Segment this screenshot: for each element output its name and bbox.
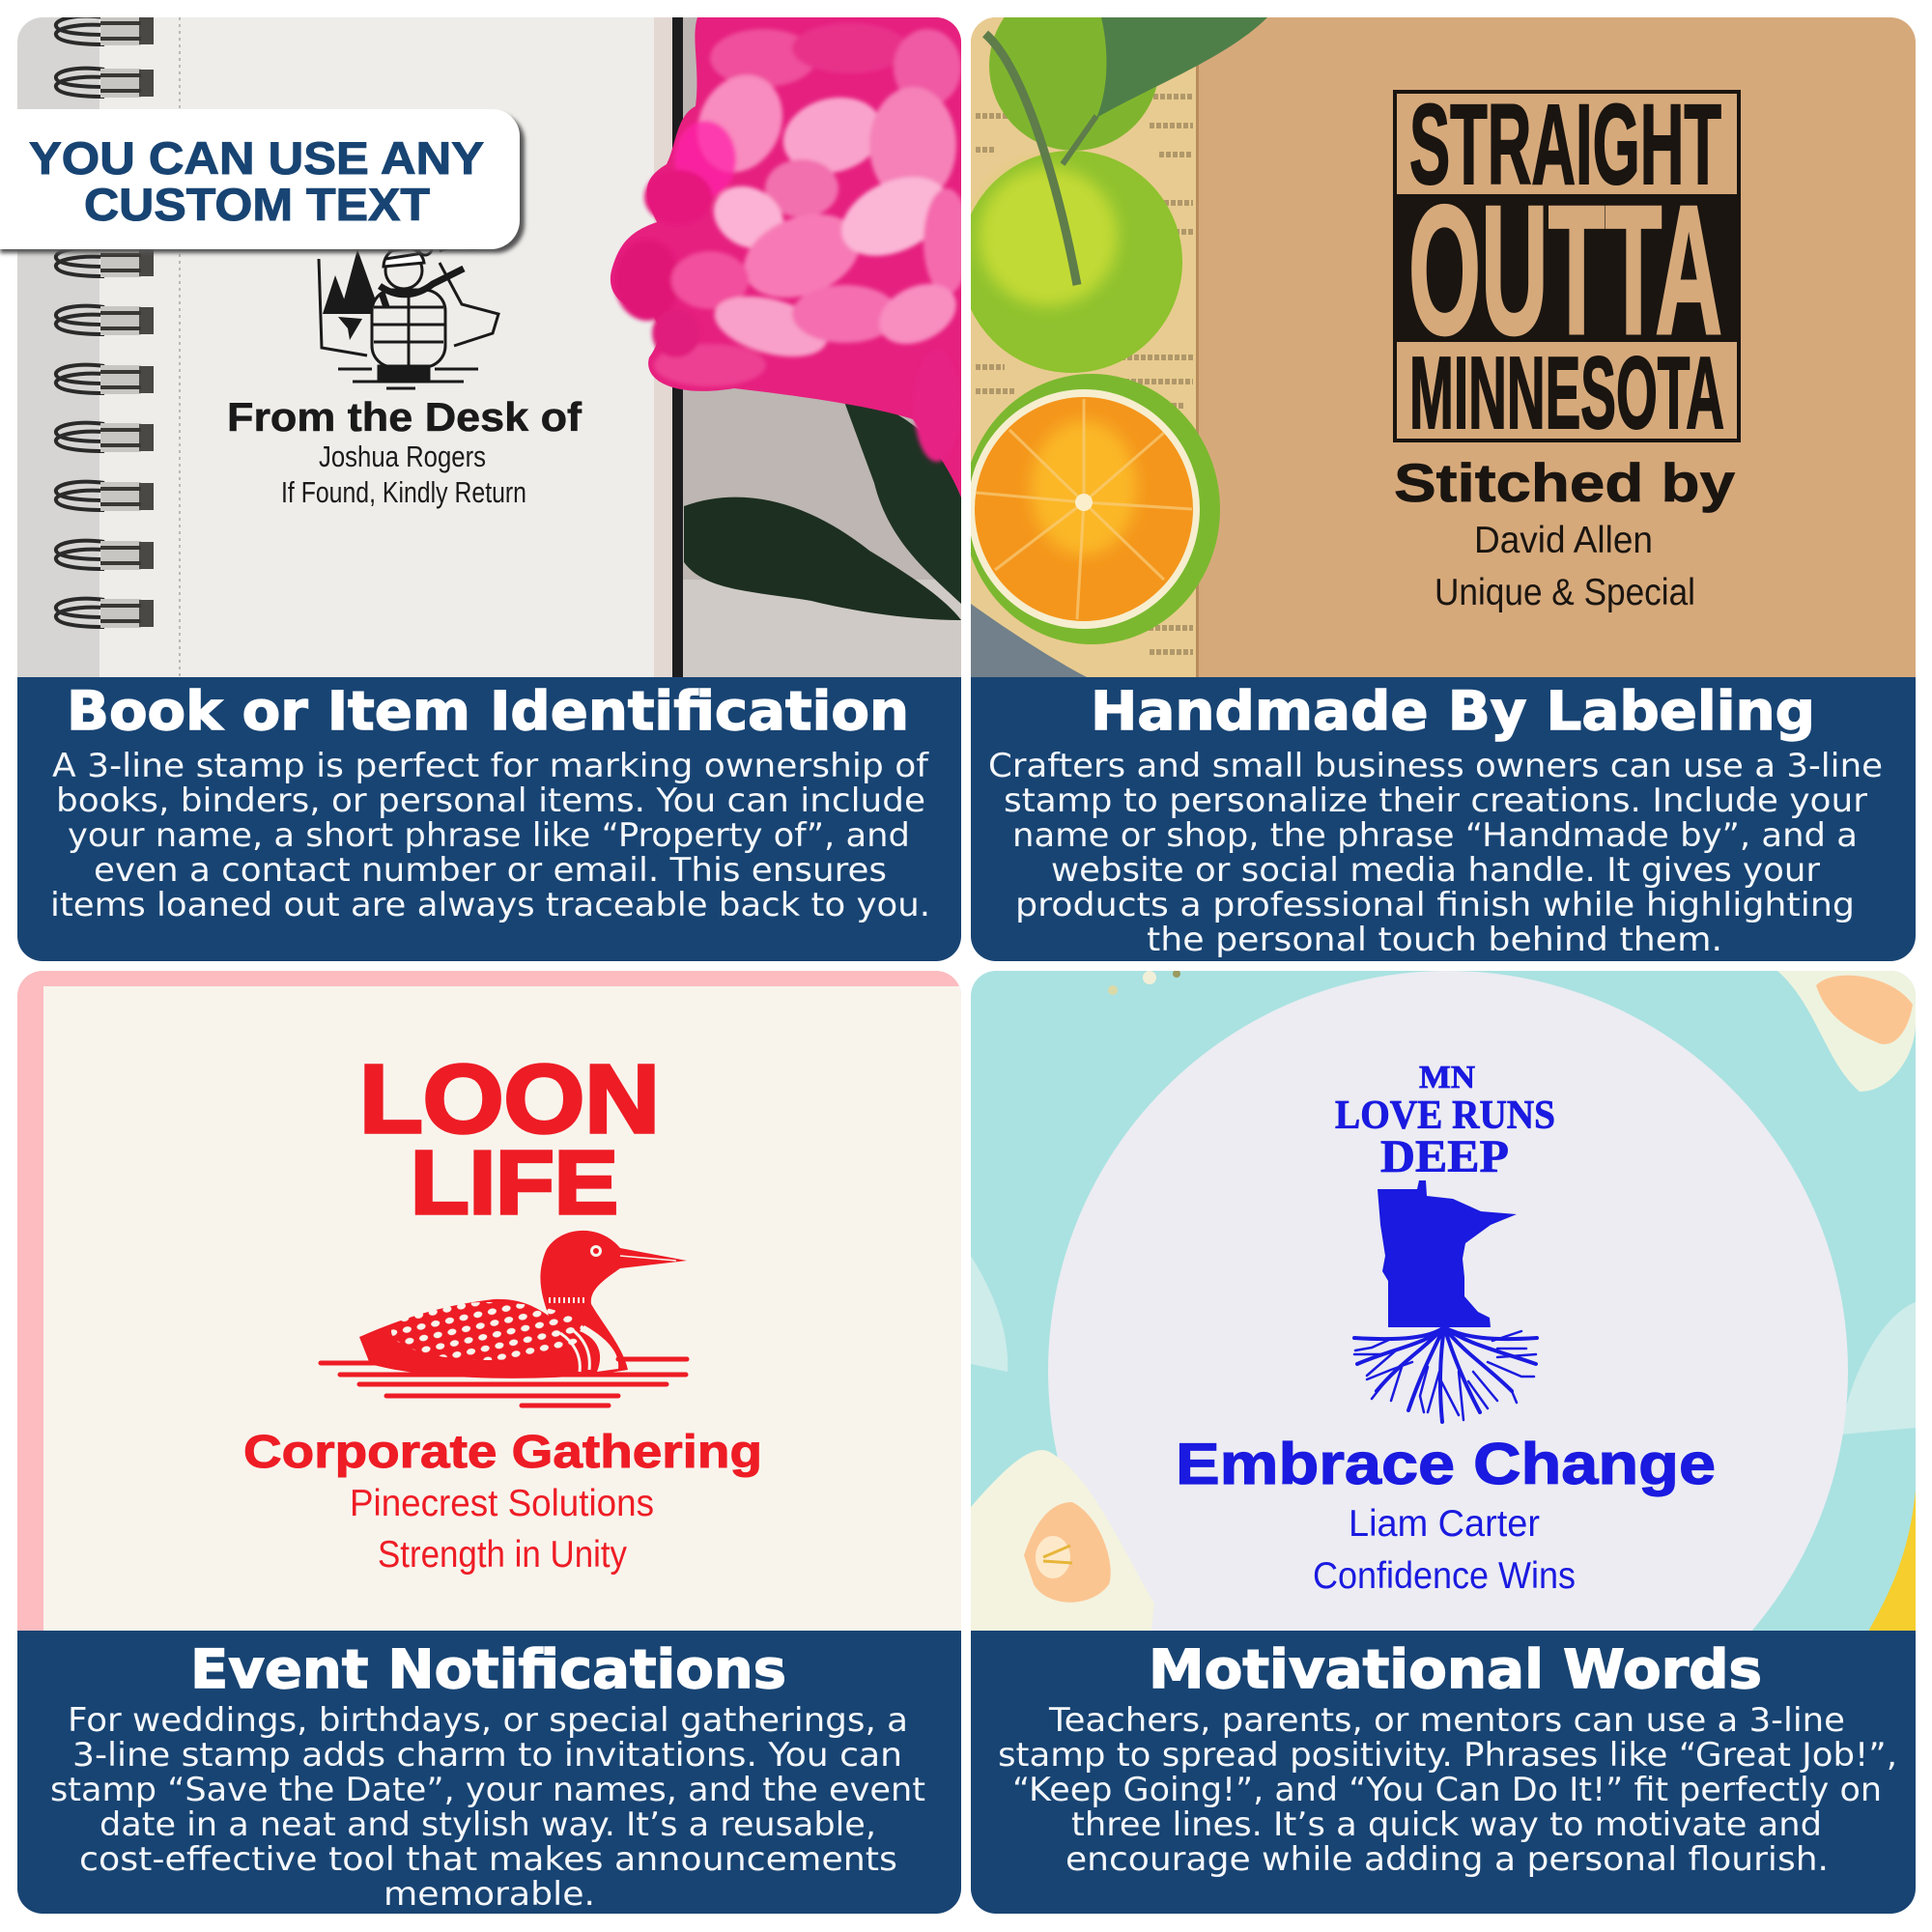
callout: you can use any custom text bbox=[0, 109, 525, 253]
stamp art: loon bbox=[321, 1231, 687, 1406]
stamp text: corporate gathering: Pinecrest Solutions bbox=[350, 1483, 654, 1524]
stamp art: snowman bbox=[319, 242, 498, 388]
icon: minnesota map with roots bbox=[1354, 1180, 1537, 1422]
stamp text: mn love runs deep: MN bbox=[1419, 1060, 1475, 1095]
kraft paper and citrus photo bbox=[960, 0, 1916, 694]
body text: Crafters and small business owners can use a 3-line bbox=[988, 747, 1883, 785]
body text bbox=[50, 747, 930, 924]
body text: stamp “Save the Date”, your names, and the event bbox=[50, 1771, 925, 1809]
callout: you can use any custom text: CUSTOM TEXT bbox=[84, 179, 430, 230]
stamp text: stitched by: David Allen bbox=[1474, 520, 1653, 561]
heading: Event Notifications bbox=[190, 1638, 786, 1700]
stamp text: loon life bbox=[359, 1045, 660, 1233]
callout: you can use any custom text: YOU CAN USE ANY bbox=[29, 132, 484, 184]
caption band bbox=[971, 1631, 1916, 1914]
stamp text: stitched by: Stitched by bbox=[1394, 452, 1735, 513]
stamp art: straight outta minnesota bbox=[1395, 81, 1739, 450]
panel: book or item identification bbox=[17, 16, 970, 961]
body text: even a contact number or email. This ensures bbox=[94, 851, 887, 890]
body text bbox=[998, 1701, 1897, 1879]
stamp text: mn love runs deep: LOVE RUNS bbox=[1335, 1094, 1555, 1138]
stamp text: mn love runs deep: DEEP bbox=[1380, 1131, 1509, 1182]
body text: “Keep Going!”, and “You Can Do It!” fit perfectly on bbox=[1012, 1771, 1882, 1809]
stamp text: from the desk of: If Found, Kindly Return bbox=[281, 475, 526, 509]
body text: A 3-line stamp is perfect for marking ownership of bbox=[52, 747, 929, 785]
body text bbox=[988, 747, 1883, 959]
notebook photo bbox=[17, 16, 970, 694]
stamp text: from the desk of bbox=[227, 394, 582, 509]
panel: motivational words bbox=[971, 970, 1916, 1914]
stamp text: embrace change: Confidence Wins bbox=[1313, 1555, 1576, 1597]
body text: For weddings, birthdays, or special gatherings, a bbox=[68, 1701, 908, 1740]
stamp text: loon life: LIFE bbox=[411, 1132, 618, 1233]
caption band bbox=[971, 677, 1916, 961]
heading: Handmade By Labeling bbox=[1091, 680, 1815, 742]
body text: memorable. bbox=[384, 1875, 595, 1914]
panel: handmade by labeling bbox=[960, 0, 1916, 961]
stamp text: corporate gathering bbox=[243, 1427, 762, 1576]
stamp text: embrace change: Embrace Change bbox=[1176, 1432, 1716, 1496]
stamp text: loon life: LOON bbox=[359, 1045, 660, 1153]
stamp text: stitched by: Unique & Special bbox=[1435, 572, 1695, 613]
panel: event notifications bbox=[17, 971, 961, 1914]
body text: the personal touch behind them. bbox=[1147, 921, 1722, 959]
stamp text: embrace change: Liam Carter bbox=[1349, 1503, 1540, 1545]
body text: three lines. It’s a quick way to motivate and bbox=[1071, 1805, 1822, 1844]
body text: date in a neat and stylish way. It’s a reusable, bbox=[99, 1805, 876, 1844]
caption band bbox=[17, 1631, 961, 1914]
stamp text: corporate gathering: Strength in Unity bbox=[378, 1534, 627, 1576]
heading: Motivational Words bbox=[1149, 1638, 1762, 1700]
body text: items loaned out are always traceable back to you. bbox=[50, 886, 930, 924]
body text: stamp to spread positivity. Phrases like “Great Job!”, bbox=[998, 1736, 1897, 1775]
body text: your name, a short phrase like “Property of”, and bbox=[68, 816, 910, 855]
body text: products a professional finish while highlighting bbox=[1015, 886, 1855, 924]
paper photo bbox=[17, 971, 961, 1647]
body text: books, binders, or personal items. You can include bbox=[56, 781, 925, 820]
circle and flowers photo bbox=[971, 971, 1916, 1631]
stamp text: embrace change bbox=[1176, 1432, 1716, 1597]
body text bbox=[50, 1701, 925, 1914]
heading: Book or Item Identification bbox=[67, 680, 909, 742]
body text: stamp to personalize their creations. Include your bbox=[1004, 781, 1867, 820]
stamp text: from the desk of: Joshua Rogers bbox=[319, 440, 486, 473]
body text: website or social media handle. It gives your bbox=[1051, 851, 1820, 890]
body text: encourage while adding a personal flourish. bbox=[1065, 1840, 1829, 1879]
body text: 3-line stamp adds charm to invitations. You can bbox=[72, 1736, 902, 1775]
body text: name or shop, the phrase “Handmade by”, and a bbox=[1012, 816, 1858, 855]
stamp text: mn love runs deep bbox=[1335, 1060, 1555, 1182]
body text: Teachers, parents, or mentors can use a 3-line bbox=[1048, 1701, 1845, 1740]
stamp text: stitched by bbox=[1394, 452, 1735, 613]
body text: cost-effective tool that makes announcements bbox=[79, 1840, 897, 1879]
caption band bbox=[17, 677, 961, 961]
stamp text: from the desk of: From the Desk of bbox=[227, 394, 582, 440]
stamp text: corporate gathering: Corporate Gathering bbox=[243, 1427, 762, 1478]
